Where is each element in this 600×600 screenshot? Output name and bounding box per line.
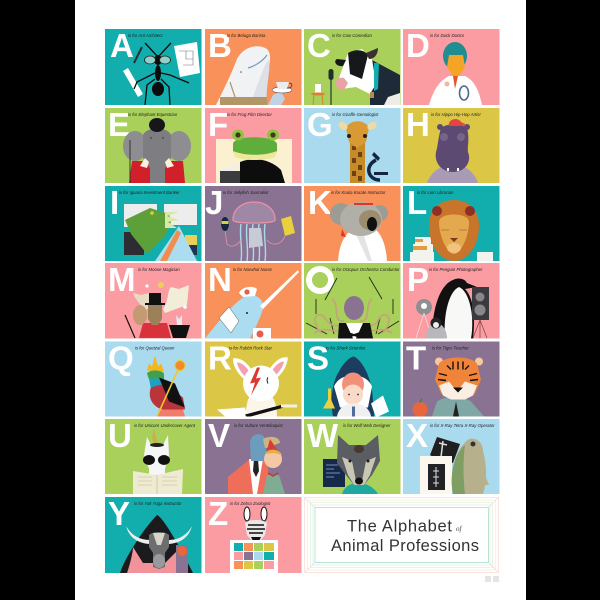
- letter E: E: [108, 106, 130, 143]
- illustration: cow at microphone: [311, 48, 400, 105]
- caption Y: is for Yak Yoga Instructor: [134, 501, 182, 506]
- illustration: unicorn with newspaper: [133, 429, 183, 494]
- caption J: is for Jellyfish Journalist: [223, 190, 269, 195]
- panel: V is for Vulture Ventriloquist: [205, 417, 302, 494]
- illustration: rabbit rock star: [217, 357, 297, 418]
- caption D: is for Duck Doctor: [430, 33, 465, 38]
- letter A: A: [110, 27, 134, 64]
- illustration: beluga with coffee: [216, 46, 292, 105]
- letter Y: Y: [108, 495, 130, 532]
- illustration: narwhal nurse: [205, 270, 299, 339]
- panel: F is for Frog Film Director: [205, 106, 302, 183]
- letter Z: Z: [208, 495, 228, 532]
- panel: U is for Unicorn Undercover Agent: [105, 417, 202, 494]
- letter F: F: [208, 106, 228, 143]
- caption H: is for Hippo Hip-Hop Artist: [431, 112, 481, 117]
- caption W: is for Wolf Web Designer: [343, 423, 391, 428]
- letter U: U: [108, 417, 132, 454]
- panel: K is for Koala Karate Instructor: [304, 184, 400, 261]
- caption I: is for Iguana Investment Banker: [119, 190, 180, 195]
- letter G: G: [307, 106, 333, 143]
- caption F: is for Frog Film Director: [227, 112, 272, 117]
- letter Q: Q: [108, 340, 134, 376]
- caption T: is for Tiger Teacher: [432, 346, 469, 350]
- panel: G is for Giraffe Gemologist: [304, 106, 400, 183]
- illustration: elephant in riding coat: [123, 118, 191, 183]
- illustration: jellyfish with microphone: [221, 202, 295, 261]
- letter J: J: [205, 184, 223, 221]
- letter N: N: [208, 261, 232, 298]
- illustration: hippo with cap: [427, 119, 478, 183]
- panel: D is for Duck Doctor: [403, 27, 500, 105]
- panel: S is for Shark Scientist: [304, 340, 400, 416]
- illustration: yak in yoga pose: [120, 515, 193, 573]
- panel: T is for Tiger Teacher: [403, 340, 500, 416]
- caption N: is for Narwhal Nurse: [233, 267, 273, 272]
- panel: E is for Elephant Equestrian: [105, 106, 202, 183]
- illustration: x-ray tetra with films: [420, 437, 489, 494]
- caption C: is for Cow Comedian: [332, 33, 372, 38]
- caption V: is for Vulture Ventriloquist: [234, 423, 284, 428]
- letter H: H: [406, 106, 430, 143]
- letter M: M: [108, 261, 136, 298]
- caption R: is for Rabbit Rock Star: [229, 346, 273, 350]
- panel: L is for Lion Librarian: [403, 184, 500, 261]
- letter I: I: [110, 184, 119, 221]
- title line two: Animal Professions: [331, 537, 479, 555]
- caption L: is for Lion Librarian: [417, 190, 454, 195]
- illustration: vulture and puppet: [228, 434, 285, 494]
- caption M: is for Moose Magician: [138, 267, 180, 272]
- illustration: shark scientist: [323, 356, 389, 418]
- illustration: tiger with apple: [412, 358, 484, 417]
- illustration: frog and clapperboard: [216, 130, 292, 183]
- panel: C is for Cow Comedian: [304, 27, 400, 105]
- caption Z: is for Zebra Zoologist: [230, 501, 271, 506]
- illustration: octopus conductor: [306, 277, 399, 338]
- illustration: moose with top hat: [125, 282, 190, 338]
- panel: M is for Moose Magician: [105, 261, 202, 338]
- panel: H is for Hippo Hip-Hop Artist: [403, 106, 500, 183]
- caption K: is for Koala Karate Instructor: [331, 190, 386, 195]
- letter R: R: [208, 340, 232, 376]
- title word of: of: [456, 525, 462, 533]
- caption X: is for X-Ray Tetra X-Ray Operator: [430, 423, 495, 428]
- panel: X is for X-Ray Tetra X-Ray Operator: [403, 417, 500, 494]
- caption G: is for Giraffe Gemologist: [332, 112, 379, 117]
- panel: I is for Iguana Investment Banker: [105, 184, 202, 261]
- illustration: penguin with camera: [416, 279, 489, 338]
- illustration: ant with blueprint: [123, 42, 200, 105]
- panel: P is for Penguin Photographer: [403, 261, 500, 338]
- letter B: B: [208, 27, 232, 64]
- caption E: is for Elephant Equestrian: [128, 112, 178, 117]
- panel: N is for Narwhal Nurse: [205, 261, 302, 338]
- illustration: quetzal with crown and sceptre: [147, 356, 185, 416]
- illustration: duck in doctor coat: [429, 42, 482, 105]
- illustration: iguana and screens: [124, 204, 197, 261]
- panel: A is for Ant Architect: [105, 27, 202, 105]
- illustration: koala in karate gi: [330, 202, 388, 261]
- caption S: is for Shark Scientist: [326, 346, 366, 350]
- letter K: K: [308, 184, 332, 221]
- letter D: D: [406, 27, 430, 64]
- panel: B is for Beluga Barista: [205, 27, 302, 105]
- caption Q: is for Quetzal Queen: [135, 346, 175, 350]
- publisher mark: [485, 576, 499, 582]
- title block: The Alphabet of Animal Professions: [304, 498, 498, 572]
- letter W: W: [307, 417, 339, 454]
- caption A: is for Ant Architect: [128, 33, 163, 38]
- caption P: is for Penguin Photographer: [429, 267, 483, 272]
- caption B: is for Beluga Barista: [227, 33, 266, 38]
- illustration: giraffe and microscope: [337, 120, 388, 183]
- white poster sheet: [75, 0, 526, 600]
- letter P: P: [407, 261, 429, 298]
- title line one: The Alphabet: [347, 518, 452, 536]
- panel: Y is for Yak Yoga Instructor: [105, 495, 202, 573]
- caption O: is for Octopus Orchestra Conductor: [332, 267, 400, 272]
- panel: Z is for Zebra Zoologist: [205, 495, 302, 573]
- panel: R is for Rabbit Rock Star: [205, 340, 302, 416]
- letter L: L: [407, 184, 427, 221]
- letter T: T: [406, 340, 426, 376]
- illustration: wolf and monitor: [323, 435, 380, 494]
- letter V: V: [208, 417, 230, 454]
- caption U: is for Unicorn Undercover Agent: [134, 423, 196, 428]
- panel: Q is for Quetzal Queen: [105, 340, 202, 416]
- panel: O is for Octopus Orchestra Conductor: [304, 263, 400, 338]
- illustration: lion and books: [410, 200, 493, 261]
- letter X: X: [406, 417, 428, 454]
- panel: W is for Wolf Web Designer: [304, 417, 400, 494]
- panel: J is for Jellyfish Journalist: [205, 184, 302, 261]
- illustration: zebra holding animal chart: [230, 507, 278, 573]
- decorative frame: [304, 498, 498, 572]
- letter S: S: [307, 340, 329, 376]
- letter O: [309, 269, 331, 291]
- letter C: C: [307, 27, 331, 64]
